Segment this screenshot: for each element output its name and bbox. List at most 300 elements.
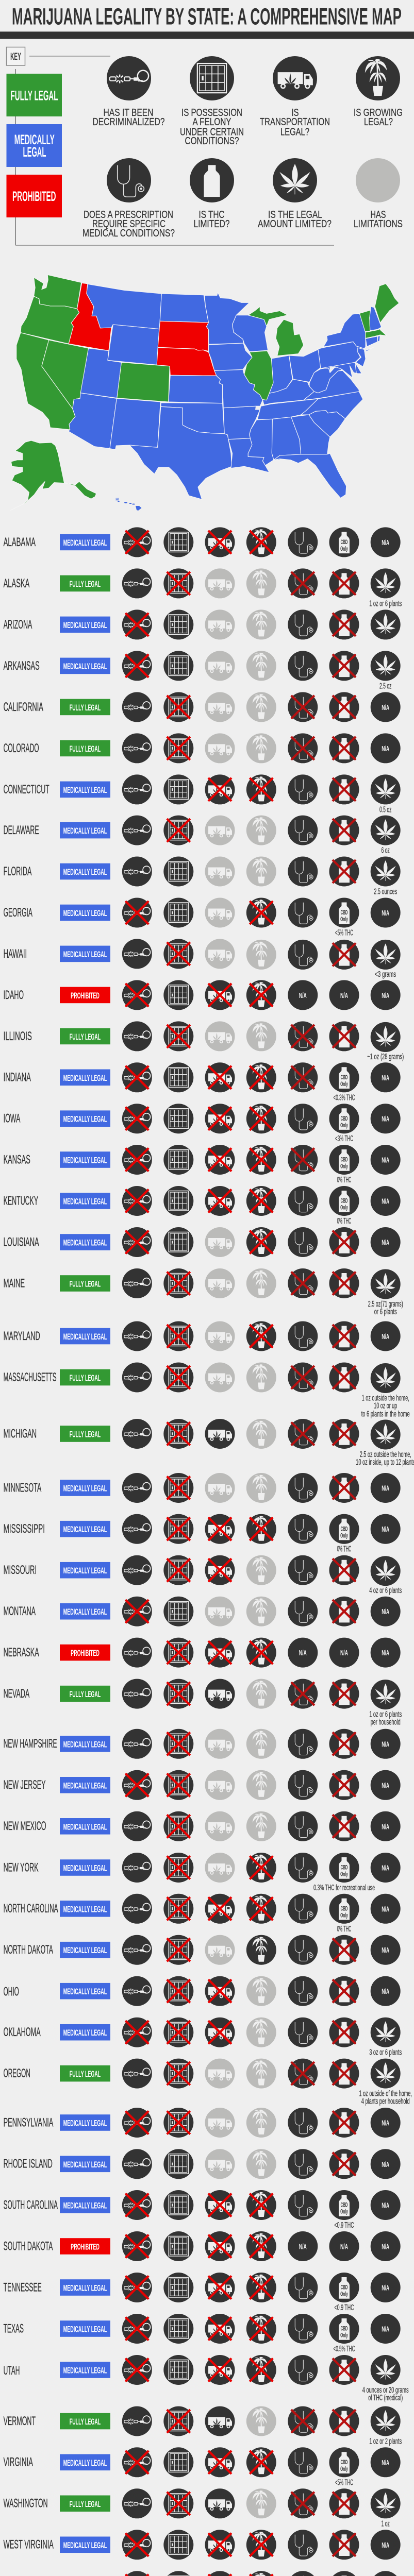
icon: stethoscope [288,1021,318,1051]
icon: bottle [329,2059,359,2089]
icon: bottle [329,1419,359,1449]
icon: leaf [371,609,401,639]
icon: bottle [329,1597,359,1626]
icon: jail [163,1853,193,1883]
icon: truck [205,2530,235,2560]
icon: truck [205,980,235,1010]
icon: stethoscope [288,1321,318,1351]
caption [369,1710,402,1727]
icon: truck [205,1104,235,1133]
icon: truck [205,1976,235,2006]
row: Idaho [4,980,401,1010]
icon: N/A [288,2231,318,2261]
icon: truck [205,1186,235,1216]
icon: N/A: N/A [382,1822,389,1831]
caption: 1 oz [382,2519,390,2528]
icon: N/A: N/A [382,1905,389,1913]
status badge: MEDICALLY LEGAL [63,1073,107,1083]
icon: N/A: N/A [382,1781,389,1790]
icon: N/A: N/A [382,1525,389,1534]
status badge [60,2320,110,2337]
icon: N/A: N/A [382,2201,389,2210]
status badge: MEDICALLY LEGAL [63,2540,107,2550]
icon: leaf [371,2018,401,2047]
icon: N/A [371,1935,401,1965]
icon: N/A [371,1145,401,1175]
icon: CBD bottle [329,2314,359,2344]
icon: CBD bottle: Only [340,1911,348,1919]
icon: stethoscope [288,1770,318,1800]
icon: stethoscope [288,1811,318,1841]
icon: stethoscope [288,897,318,927]
row: New Hampshire: NEW HAMPSHIRE [4,1737,57,1751]
icon: jail [163,2231,193,2261]
row: South Carolina: SOUTH CAROLINA [4,2198,58,2212]
caption: 2.5 ounces [374,887,397,896]
icon: jail [163,2273,193,2302]
icon: cuffs [122,2314,152,2344]
status badge: MEDICALLY LEGAL [63,2160,107,2170]
icon: truck [205,1062,235,1092]
status badge [60,2156,110,2172]
icon: truck [205,1362,235,1392]
icon: jail [163,1227,193,1257]
icon: cuffs [122,816,152,845]
icon: CBD bottle: Only [340,2208,348,2215]
icon: N/A: N/A [382,1332,389,1341]
icon: cuffs [122,2190,152,2220]
status badge: MEDICALLY LEGAL [63,662,107,671]
icon: N/A: N/A [382,2325,389,2334]
row: Colorado: COLORADO [4,741,39,755]
icon: plant [246,856,276,886]
icon: truck [205,1514,235,1544]
icon: truck [205,1145,235,1175]
icon: jail [163,980,193,1010]
key item: growing: LEGAL? [364,116,393,128]
icon: N/A: N/A [299,2242,307,2251]
icon: cuffs [122,1145,152,1175]
icon: jail [163,2355,193,2385]
state name: KANSAS [4,1153,30,1166]
icon: N/A: N/A [382,1864,389,1872]
status badge: MEDICALLY LEGAL [63,2119,107,2128]
icon: CBD bottle: CBD [341,1074,348,1081]
icon: plant [246,1935,276,1965]
icon: cuffs [122,2530,152,2560]
icon: plant [246,2190,276,2220]
icon: N/A: N/A [382,1740,389,1749]
legend: medically legal [6,124,62,167]
icon: leaf [371,1556,401,1586]
status badge [60,1983,110,1999]
icon: truck [205,2273,235,2302]
status badge [60,1110,110,1127]
icon: plant [246,2231,276,2261]
state name: NORTH DAKOTA [4,1943,53,1957]
icon: CBD bottle: Only [340,2291,348,2298]
icon: truck [205,1021,235,1051]
icon: jail [163,609,193,639]
row: Montana [4,1597,401,1626]
row: Kentucky [4,1186,401,1226]
state name: MINNESOTA [4,1481,42,1495]
state name: RHODE ISLAND [4,2157,53,2171]
icon: N/A: N/A [382,744,389,753]
icon: CBD bottle: CBD [341,1864,348,1871]
icon: leaf [371,1022,401,1052]
icon: stethoscope [288,1679,318,1709]
icon: cuffs [122,692,152,722]
icon: CBD bottle: Only [340,2465,348,2472]
state name: NEBRASKA [4,1646,39,1659]
legend: prohibited [6,175,62,217]
icon: N/A [288,1638,318,1668]
icon: bottle [329,2355,359,2385]
icon: CBD bottle: Only [340,1080,348,1088]
row: North Carolina [4,1894,401,1934]
icon: cuffs [122,2273,152,2302]
status badge: MEDICALLY LEGAL [63,1155,107,1165]
icon: truck [205,2108,235,2138]
status badge [60,1193,110,1209]
caption: <5% THC [335,928,353,938]
icon: cuffs [122,1638,152,1668]
icon: cuffs [122,774,152,804]
icon: cuffs [122,1021,152,1051]
row: New Mexico [4,1811,401,1841]
icon: plant [246,2447,276,2477]
row: Iowa [4,1104,401,1143]
key item: transportation: TRANSPORTATION [260,116,330,128]
icon: cuffs [122,1186,152,1216]
row: Missouri [4,1555,402,1595]
icon: N/A: N/A [382,1074,389,1082]
status badge [60,1151,110,1168]
row: Ohio [4,1976,401,2006]
icon: N/A [371,1976,401,2006]
icon: jail [163,1976,193,2006]
icon: truck [205,2571,235,2576]
status badge: FULLY LEGAL [70,2499,101,2509]
icon: leaf [371,856,401,886]
icon: truck [205,1268,235,1298]
status badge: MEDICALLY LEGAL [63,1332,107,1342]
legend: fully legal [6,74,62,116]
status badge [60,2065,110,2081]
row: Oregon: OREGON [4,2066,30,2080]
icon: plant [246,1770,276,1800]
icon: N/A [371,1638,401,1668]
icon: N/A [371,2447,401,2477]
icon: jail [163,1062,193,1092]
status badge: MEDICALLY LEGAL [63,2283,107,2293]
status badge: MEDICALLY LEGAL [63,1566,107,1575]
icon: plant [246,1062,276,1092]
status badge [60,740,110,756]
row: Alabama [4,527,401,557]
icon: bottle [329,1321,359,1351]
icon: stethoscope [288,1145,318,1175]
status badge: PROHIBITED [71,1648,100,1658]
icon: stethoscope [288,692,318,722]
caption: 2.5 oz [379,682,391,690]
key item: amount limited [258,158,332,230]
icon: jail [163,2406,193,2436]
key item: THC limited: LIMITED? [194,218,230,230]
icon: N/A [288,980,318,1010]
row: Louisiana [4,1227,401,1257]
icon: cuffs [122,1321,152,1351]
status badge: MEDICALLY LEGAL [63,1863,107,1873]
icon: cuffs [122,1419,152,1449]
icon: plant [246,2059,276,2089]
row: Mississippi [4,1514,401,1554]
icon: jail [163,2149,193,2179]
icon: truck [205,1894,235,1924]
icon: cuffs [122,1227,152,1257]
state name: ALABAMA [4,535,36,549]
caption [356,1450,414,1467]
row: Mississippi: 0% THC [337,1545,351,1554]
status badge: MEDICALLY LEGAL [63,908,107,918]
state name: MICHIGAN [4,1427,37,1440]
row: Florida [4,856,401,896]
icon: leaf [371,774,401,804]
icon: cuffs [122,2406,152,2436]
icon: stethoscope [288,1227,318,1257]
status badge [60,1818,110,1835]
status badge [60,1070,110,1086]
status badge [60,575,110,591]
icon: stethoscope [288,1186,318,1216]
state name: ARIZONA [4,618,32,632]
icon: plant [246,774,276,804]
icon: plant [246,2108,276,2138]
icon: stethoscope [288,527,318,557]
row: Nebraska [4,1638,401,1668]
icon: N/A: N/A [382,2541,389,2550]
icon: CBD bottle: CBD [341,1905,348,1912]
icon: truck [205,1729,235,1759]
icon: CBD bottle: CBD [341,1525,348,1532]
icon: CBD bottle: Only [340,1871,348,1878]
row: California [4,692,401,722]
icon: cuffs [122,2488,152,2518]
icon: N/A [371,2149,401,2179]
row: West Virginia [4,2530,401,2560]
state name: VIRGINIA [4,2455,33,2469]
status badge [60,658,110,674]
icon: plant [246,1811,276,1841]
key item: felony: CONDITIONS? [185,135,239,147]
status badge: MEDICALLY LEGAL [63,2325,107,2334]
icon: jail [163,1770,193,1800]
row: Oregon [4,2059,412,2106]
key item: prescription: MEDICAL CONDITIONS? [82,228,175,239]
status badge: FULLY LEGAL [70,1373,101,1383]
icon: bottle [329,1021,359,1051]
icon: cuffs [122,2447,152,2477]
icon: plant [246,1976,276,2006]
icon: bottle [329,1770,359,1800]
icon: N/A [371,2231,401,2261]
icon: CBD bottle: Only [340,916,348,923]
key item: THC limited: IS THC [199,209,225,221]
icon: plant [246,2530,276,2560]
icon: CBD bottle [329,1894,359,1924]
icon: bottle [329,733,359,763]
state name: MISSISSIPPI [4,1522,45,1536]
icon: jail [163,1811,193,1841]
icon: truck [205,856,235,886]
icon: stethoscope [288,774,318,804]
icon: CBD bottle [329,2190,359,2220]
key item: decriminalized: DECRIMINALIZED? [93,116,165,128]
icon: cuffs [122,651,152,681]
state name: NEW JERSEY [4,1778,46,1792]
icon: plant [246,1419,276,1449]
row: Wisconsin [4,2571,401,2576]
state name: ILLINOIS [4,1029,32,1043]
icon: N/A [371,2571,401,2576]
icon: cuffs [122,2231,152,2261]
icon: N/A: N/A [382,1115,389,1124]
icon: N/A [371,1227,401,1257]
icon: jail [163,2108,193,2138]
icon: jail [163,1186,193,1216]
icon: leaf [371,816,401,845]
icon: stethoscope [288,2190,318,2220]
icon: jail [163,1597,193,1626]
icon: N/A: N/A [382,2119,389,2128]
icon: bottle [329,1268,359,1298]
icon: N/A: N/A [382,2459,389,2467]
status badge [60,987,110,1003]
icon: N/A [371,2190,401,2220]
icon: N/A [371,1321,401,1351]
status badge: PROHIBITED [71,2242,100,2251]
icon: leaf [371,940,401,970]
icon: jail [163,1638,193,1668]
icon: jail [163,733,193,763]
icon: CBD bottle: CBD [341,2201,348,2209]
row: Georgia [4,897,401,938]
icon: jail [163,2018,193,2047]
caption: or 6 plants [374,1308,397,1316]
icon: plant [246,1679,276,1709]
icon: jail [163,1104,193,1133]
state name: ARKANSAS [4,659,40,673]
status badge: FULLY LEGAL [70,703,101,713]
icon: truck [205,1853,235,1883]
key item: felony: UNDER CERTAIN [180,127,244,138]
icon: truck [205,897,235,927]
icon: cuffs [122,2059,152,2089]
status badge: MEDICALLY LEGAL [63,1739,107,1749]
state name: WEST VIRGINIA [4,2538,54,2552]
row: North Carolina: 0% THC [337,1925,351,1934]
row: Michigan [4,1419,414,1467]
icon: N/A: N/A [382,1607,389,1616]
icon: leaf [371,568,401,598]
icon: CBD bottle: CBD [341,538,348,546]
icon: truck [205,2018,235,2047]
icon: truck [205,2355,235,2385]
caption: <3 grams [375,970,396,979]
icon: leaf [371,1363,401,1393]
icon: cuffs [122,2108,152,2138]
icon: stethoscope [288,609,318,639]
status badge: FULLY LEGAL [70,1689,101,1699]
status badge: MEDICALLY LEGAL [63,1987,107,1996]
icon: stethoscope [288,1935,318,1965]
icon: cuffs [122,733,152,763]
key label [6,47,25,65]
icon: plant [246,527,276,557]
icon: CBD bottle [329,2571,359,2576]
row: Utah [4,2355,409,2402]
icon: CBD bottle [329,897,359,927]
status badge: MEDICALLY LEGAL [63,826,107,836]
icon: N/A: N/A [382,1649,389,1657]
icon: jail [163,939,193,969]
caption: <3% THC [335,1134,353,1143]
row: New Hampshire [4,1729,401,1759]
state name: PENNSYLVANIA [4,2115,54,2129]
caption: <0.3% THC [333,1093,355,1102]
row: Maine [4,1268,403,1316]
status badge [60,863,110,879]
icon: N/A: N/A [382,2242,389,2251]
icon: N/A [371,1514,401,1544]
icon: plant [246,733,276,763]
icon: CBD bottle [329,1145,359,1175]
state name: IDAHO [4,988,24,1002]
icon: CBD bottle [329,1514,359,1544]
row: Arkansas [4,651,401,690]
icon: bottle [329,1555,359,1585]
icon: jail [163,1894,193,1924]
icon: N/A [371,1186,401,1216]
icon: cuffs [122,568,152,598]
icon: truck [205,527,235,557]
icon: N/A [371,1473,401,1503]
key item: prescription [82,158,175,239]
icon: stethoscope [288,2059,318,2089]
icon: CBD bottle [329,1853,359,1883]
status badge [60,699,110,715]
icon: bottle [329,1227,359,1257]
status badge: FULLY LEGAL [70,1032,101,1042]
status badge: MEDICALLY LEGAL [63,620,107,630]
icon: N/A: N/A [340,1649,348,1657]
caption: <0.9 THC [334,2303,354,2312]
icon: N/A [371,1894,401,1924]
row: Tennessee [4,2273,401,2312]
status badge: MEDICALLY LEGAL [63,1196,107,1207]
status badge: MEDICALLY LEGAL [63,1114,107,1124]
icon: jail [163,2190,193,2220]
icon: N/A: N/A [382,991,389,1000]
icon: plant [246,1104,276,1133]
icon: bottle [329,940,359,970]
icon: truck [205,1935,235,1965]
icon: jail [163,1679,193,1709]
icon: truck [205,2406,235,2436]
icon: truck [205,2231,235,2261]
map: Hawaii [115,498,141,511]
